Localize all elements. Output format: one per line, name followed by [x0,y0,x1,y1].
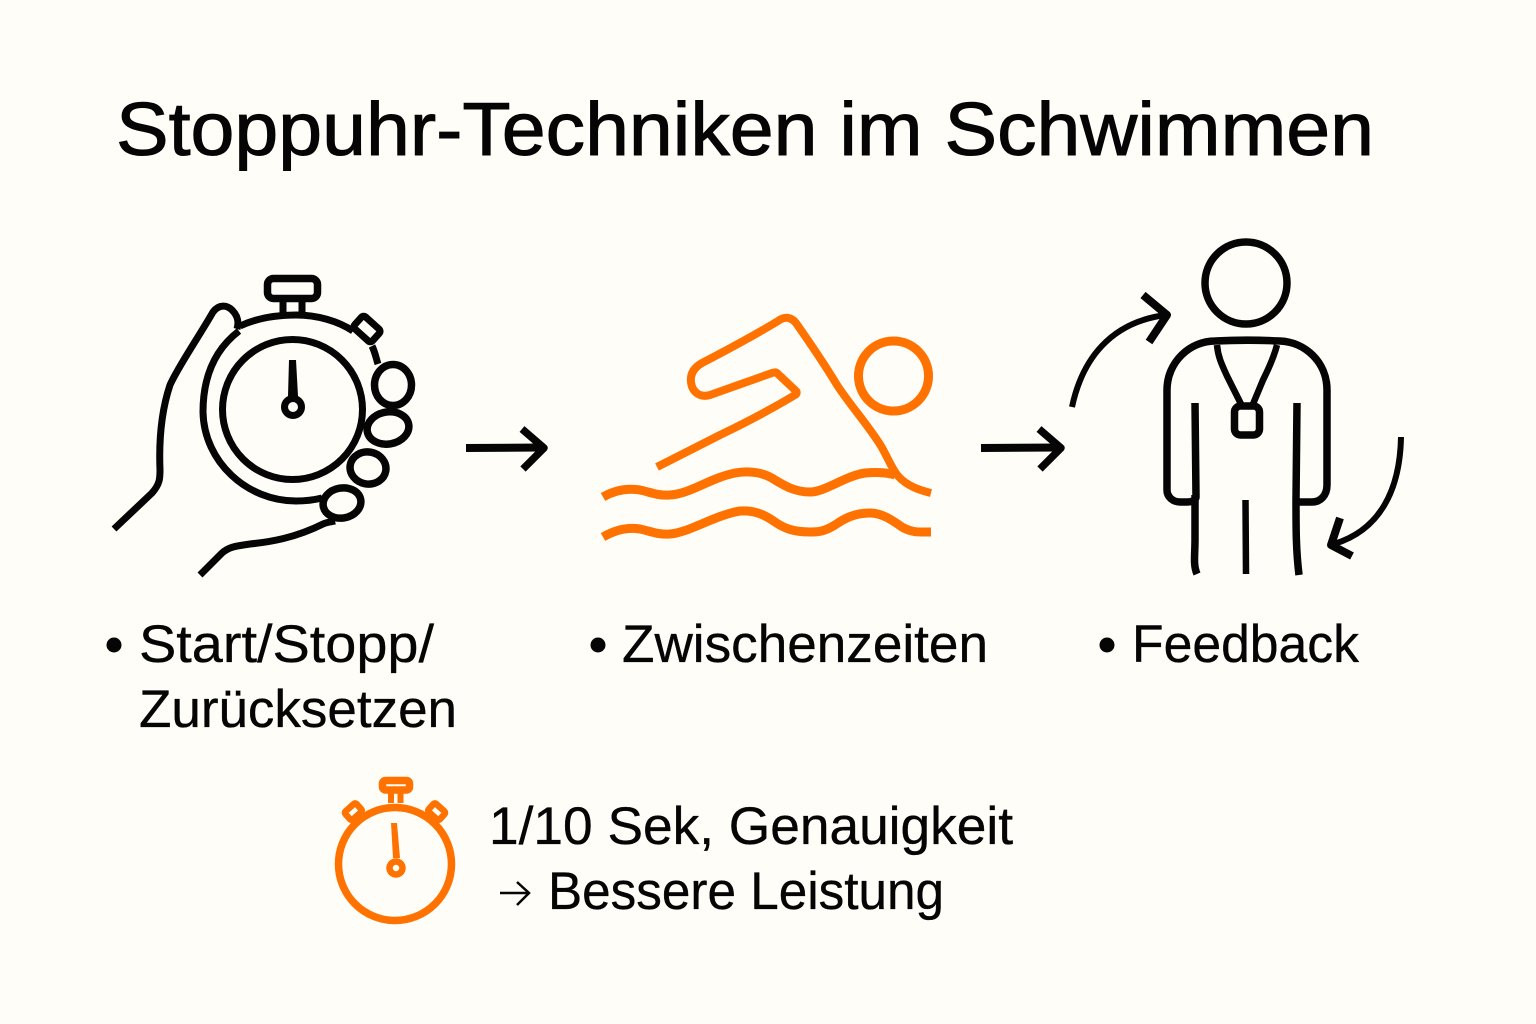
coach head [1205,242,1287,324]
bullet: Start/Stopp/Zurücksetzen: Zurücksetzen [139,680,457,739]
bullet: Start/Stopp/Zurücksetzen [106,615,457,739]
bullet: Feedback: Feedback [1132,615,1359,674]
stopwatch outer ring [203,315,378,501]
coach body [1167,340,1327,575]
upper wave [603,472,895,497]
lower wave [603,511,931,537]
feedback arrow upper [1072,295,1167,407]
stopwatch hand [284,360,302,416]
feedback arrow lower [1331,437,1401,556]
callout: accuracy and performance: Bessere Leistung [548,862,944,921]
fingers [321,364,412,521]
side button [353,315,381,343]
stopwatch dial [222,340,362,480]
lower hand outline [200,521,335,575]
bullet: Zwischenzeiten: Zwischenzeiten [622,615,988,674]
whistle badge [1234,406,1260,435]
bullet: Start/Stopp/Zurücksetzen: Start/Stopp/ [139,615,434,674]
stopwatch crown [268,278,318,314]
icon: swimmer [603,318,931,537]
lanyard [1217,345,1277,404]
arrow: stopwatch to swimmer [466,429,544,469]
thumb and palm outline [114,306,238,529]
small arrow [500,882,529,905]
center leg line [1242,500,1249,574]
icon: small orange stopwatch [338,780,452,920]
swimmer head [858,341,928,411]
title: Stoppuhr-Techniken im Schwimmen [116,87,1374,171]
callout: accuracy and performance: 1/10 Sek, Genauigkeit [489,797,1013,856]
callout: accuracy and performance [489,797,1013,921]
icon: hand holding stopwatch [114,278,412,575]
arrow: swimmer to coach [981,429,1061,469]
icon: coach with feedback arrows [1072,242,1401,575]
swimmer body and arm [657,318,931,493]
